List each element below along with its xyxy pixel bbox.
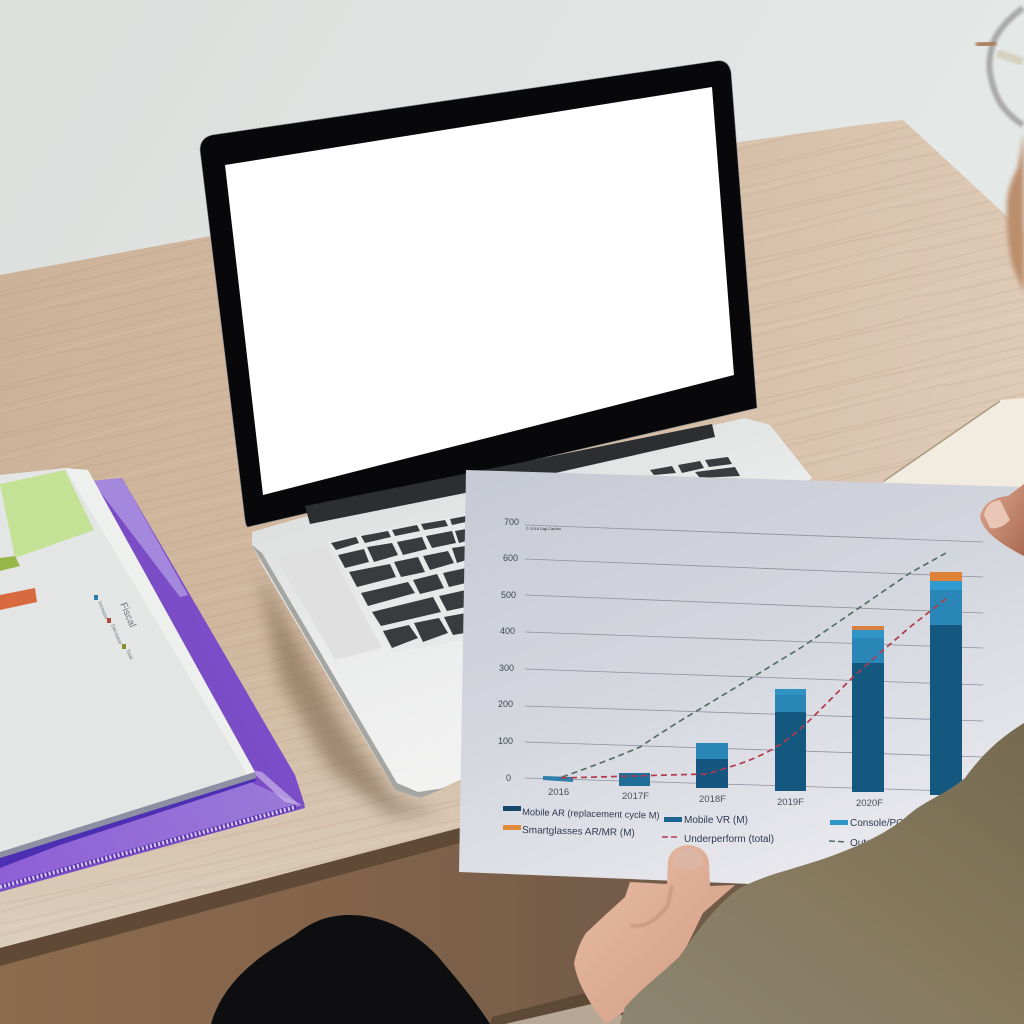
x axis labels: 2020F [856,798,883,809]
legend: Smartglasses AR/MR (M) [522,825,635,839]
chart [498,517,983,849]
copyright note: © 2016 Digi-Capital [526,526,561,531]
document legend: Fiscal [117,601,138,629]
laptop [200,61,812,798]
sticky note [0,470,94,558]
face edge [1007,132,1024,293]
lid bezel [200,61,757,527]
y axis labels: 500 [501,590,516,600]
folder inner shadow [0,775,256,868]
hinge [305,424,715,524]
x axis labels: 2016 [548,787,569,798]
legend: Underperform (total) [684,834,774,845]
document on folder [0,468,256,858]
legend [503,806,903,849]
legend: Mobile AR (replacement cycle M) [522,806,660,821]
y axis labels: 700 [504,517,519,527]
orange bar [0,588,37,610]
laptop base [252,418,812,798]
underperform dashed line [561,598,947,778]
keyboard [327,458,745,652]
x axis labels: 2019F [777,797,804,808]
laptop shadow on desk [258,570,440,815]
document legend: Total [124,648,134,661]
wall [0,0,1024,320]
folder [0,478,305,892]
desk front and floor [0,828,800,1024]
green bar [0,556,20,571]
blank screen [225,87,734,495]
document legend [94,595,138,661]
bars [543,572,962,795]
document legend: Increase [96,600,109,621]
chart paper [459,470,1024,886]
legend: Outperform [850,838,901,849]
legend: Mobile VR (M) [684,815,748,826]
legend: Console/PC [850,818,903,829]
x axis labels: 2017F [622,791,649,802]
notebook [884,398,1024,490]
sleeve [620,723,1024,1024]
y axis labels: 100 [498,736,513,746]
y axis labels: 400 [500,626,515,636]
grid lines [525,525,983,792]
document legend: Decrease [109,623,123,646]
x axis labels: 2018F [699,794,726,805]
glasses [976,8,1023,125]
upper thumb [980,484,1024,556]
outperform dashed line [562,553,946,777]
finger crease [630,885,672,926]
y axis labels: 600 [503,553,518,563]
folder zipper [0,807,296,887]
hand holding paper [574,845,735,1024]
dark trousers [211,915,490,1024]
y axis labels [498,517,519,783]
y axis labels: 200 [498,699,513,709]
trackpad [275,545,382,660]
y axis labels: 300 [499,663,514,673]
x axis labels [548,787,883,809]
y axis labels: 0 [506,773,511,783]
thumbnail [673,848,703,869]
